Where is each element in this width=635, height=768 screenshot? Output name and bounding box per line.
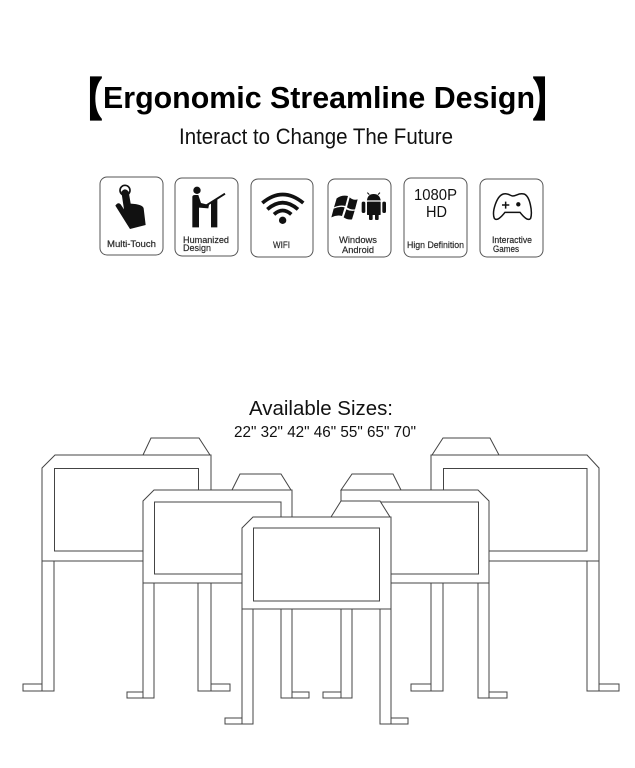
subtitle: Interact to Change The Future	[179, 124, 453, 149]
feature card: Interactive Games	[480, 179, 543, 257]
feature card: Multi-Touch: Multi-Touch	[107, 239, 156, 250]
kiosk: front centre	[225, 501, 408, 724]
icon: windows flag	[331, 196, 358, 219]
kiosk: back right	[411, 438, 619, 691]
kiosk: middle left	[127, 474, 309, 698]
title	[69, 76, 566, 125]
feature card: Interactive Games: Games	[493, 244, 519, 255]
kiosk: middle right	[323, 474, 507, 698]
feature card: Humanized Design: Humanized	[183, 235, 229, 246]
feature card: High Definition: Hign Definition	[407, 240, 464, 251]
icon: touch hand	[115, 185, 146, 229]
sizes list: 22" 32" 42" 46" 55" 65" 70"	[234, 424, 416, 441]
feature card: Windows Android: Android	[342, 245, 374, 256]
icon: wifi	[262, 194, 303, 224]
sizes heading: Available Sizes:	[249, 398, 393, 420]
feature card: Windows Android: Windows	[339, 235, 377, 246]
icon: person at kiosk	[192, 187, 225, 227]
feature card: Interactive Games: Interactive	[492, 235, 532, 246]
feature card: WIFI	[251, 179, 313, 257]
title: 】	[533, 76, 566, 125]
icon: android	[362, 193, 386, 220]
feature card: WIFI: WIFI	[273, 240, 290, 251]
feature card: High Definition	[404, 178, 467, 257]
icon: game controller	[494, 194, 531, 219]
feature card: Multi-Touch	[100, 177, 163, 255]
kiosk: back left	[23, 438, 230, 691]
feature card: High Definition: HD	[426, 204, 447, 221]
title: Ergonomic Streamline Design	[103, 80, 535, 115]
feature card: Windows Android	[328, 179, 391, 257]
feature card: High Definition: 1080P	[414, 187, 457, 204]
feature card: Humanized Design	[175, 178, 238, 256]
title: 【	[69, 76, 102, 125]
feature card: Humanized Design: Design	[183, 243, 211, 254]
